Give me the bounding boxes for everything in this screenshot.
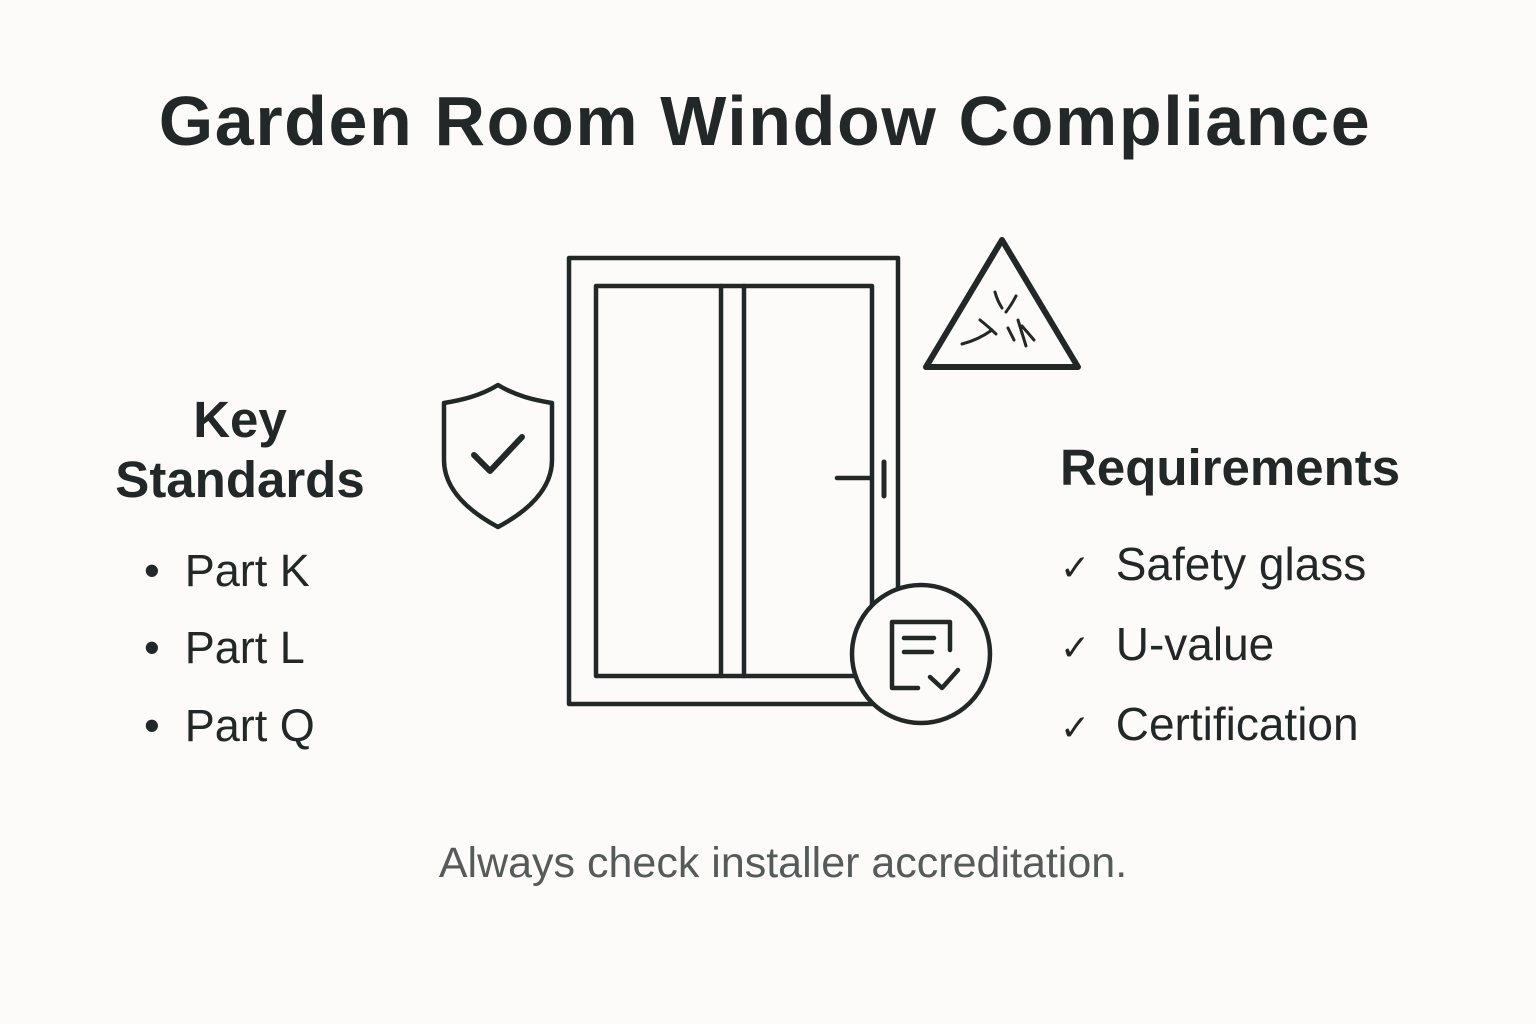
list: standards: • Part Q — [144, 700, 315, 751]
heading: key standards — [115, 391, 365, 508]
list: requirements: ✓ Certification — [1060, 698, 1359, 750]
icon: shield with check — [444, 385, 552, 527]
panel: requirements — [1060, 439, 1400, 750]
list: standards: • Part K — [144, 545, 310, 596]
title: Garden Room Window Compliance — [159, 82, 1371, 160]
icon: certificate badge — [852, 585, 990, 723]
heading: key standards: Standards — [115, 451, 365, 508]
heading: key standards: Key — [193, 391, 287, 448]
list: requirements: ✓ U-value — [1060, 618, 1274, 670]
icon: broken glass warning triangle — [926, 240, 1078, 367]
list: requirements: ✓ Safety glass — [1060, 538, 1366, 590]
heading: requirements: Requirements — [1060, 439, 1400, 496]
footer note: Always check installer accreditation. — [439, 839, 1127, 887]
window — [569, 258, 898, 704]
list: standards — [144, 545, 315, 751]
list: standards: • Part L — [144, 622, 305, 673]
panel: key standards — [115, 391, 365, 751]
list: requirements — [1060, 538, 1366, 750]
